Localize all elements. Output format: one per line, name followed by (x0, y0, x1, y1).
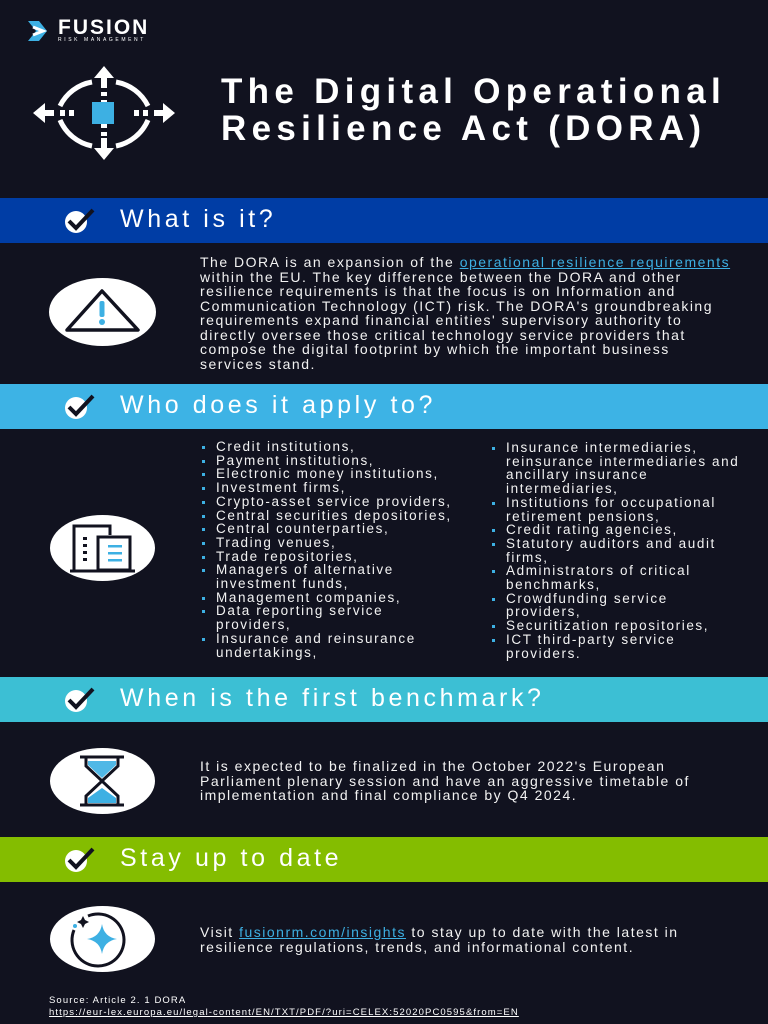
list right: reinsurance intermediaries and (506, 454, 739, 469)
list right: Credit rating agencies, (506, 522, 678, 537)
band: what is it: What is it? (120, 205, 276, 233)
source: https://eur-lex.europa.eu/legal-content/EN/TXT/PDF/?uri=CELEX:52020PC0595&from=EN (49, 1007, 519, 1018)
list right: ancillary insurance (506, 467, 648, 482)
list right: retirement pensions, (506, 509, 660, 524)
icon: building (50, 515, 155, 581)
list right: intermediaries, (506, 481, 619, 496)
list right: Insurance intermediaries, (506, 440, 698, 455)
text: what is it (200, 254, 730, 372)
logo (28, 16, 149, 43)
list left: Payment institutions, (216, 453, 374, 468)
band: what is it (0, 198, 768, 243)
list left: undertakings, (216, 645, 318, 660)
list left: Management companies, (216, 590, 401, 605)
logo: RISK MANAGEMENT (58, 37, 146, 43)
list right: Institutions for occupational (506, 495, 716, 510)
band: when (0, 677, 768, 722)
list right: Crowdfunding service (506, 591, 668, 606)
text: what is it: services stand. (200, 356, 316, 372)
text: stay: resilience regulations, trends, and informational content. (200, 938, 634, 954)
icon: warning (49, 278, 156, 346)
band: stay up to date: Stay up to date (120, 844, 342, 872)
text: what is it: requirements expand financial entities' supervisory authority to (200, 312, 682, 328)
list right: providers, (506, 604, 581, 619)
band: who (0, 384, 768, 429)
source: Source: Article 2. 1 DORA (49, 995, 186, 1006)
list left: providers, (216, 617, 291, 632)
list left (202, 439, 452, 660)
title: The Digital Operational (221, 72, 726, 111)
list right: Statutory auditors and audit (506, 536, 716, 551)
list right: providers. (506, 646, 581, 661)
list left: Credit institutions, (216, 439, 355, 454)
text: when: It is expected to be finalized in the October 2022's European (200, 758, 665, 774)
band: stay up to date (0, 837, 768, 882)
list left: investment funds, (216, 576, 349, 591)
logo: FUSION (58, 16, 149, 39)
text: what is it: resilience requirements is that the focus is on Information and (200, 283, 676, 299)
title: Resilience Act (DORA) (221, 109, 706, 148)
list left: Insurance and reinsurance (216, 631, 416, 646)
list left: Investment firms, (216, 480, 346, 495)
list right: firms, (506, 550, 549, 565)
list right: Administrators of critical (506, 563, 691, 578)
source (49, 995, 519, 1018)
list right: benchmarks, (506, 577, 601, 592)
list left: Trade repositories, (216, 549, 358, 564)
icon: star (50, 906, 155, 972)
icon: hourglass (50, 748, 155, 814)
list left: Trading venues, (216, 535, 336, 550)
list left: Electronic money institutions, (216, 466, 439, 481)
text: what is it: compose the digital footprint by which the important business (200, 341, 670, 357)
text: when: implementation and final compliance by Q4 2024. (200, 787, 577, 803)
list right: Securitization repositories, (506, 618, 709, 633)
text: when: Parliament plenary session and have an aggressive timetable of (200, 772, 690, 788)
band: when: When is the first benchmark? (120, 684, 545, 712)
list right (492, 440, 739, 661)
list left: Managers of alternative (216, 562, 394, 577)
title (221, 72, 726, 148)
text: what is it: directly oversee those critical technology service providers that (200, 326, 686, 342)
text: what is it: Communication Technology (ICT) risk. The DORA's groundbreaking (200, 298, 713, 314)
icon: arrows target (33, 66, 175, 160)
text: stay (200, 924, 679, 955)
text: when (200, 758, 690, 803)
text: what is it: The DORA is an expansion of the operational resilience requirements (200, 254, 730, 270)
text: what is it: within the EU. The key difference between the DORA and other (200, 268, 682, 284)
list left: Data reporting service (216, 603, 383, 618)
list right: ICT third-party service (506, 632, 675, 647)
text: stay: Visit fusionrm.com/insights to stay up to date with the latest in (200, 924, 679, 940)
list left: Central counterparties, (216, 521, 389, 536)
list left: Central securities depositories, (216, 508, 452, 523)
list left: Crypto-asset service providers, (216, 494, 452, 509)
band: who: Who does it apply to? (120, 391, 436, 419)
